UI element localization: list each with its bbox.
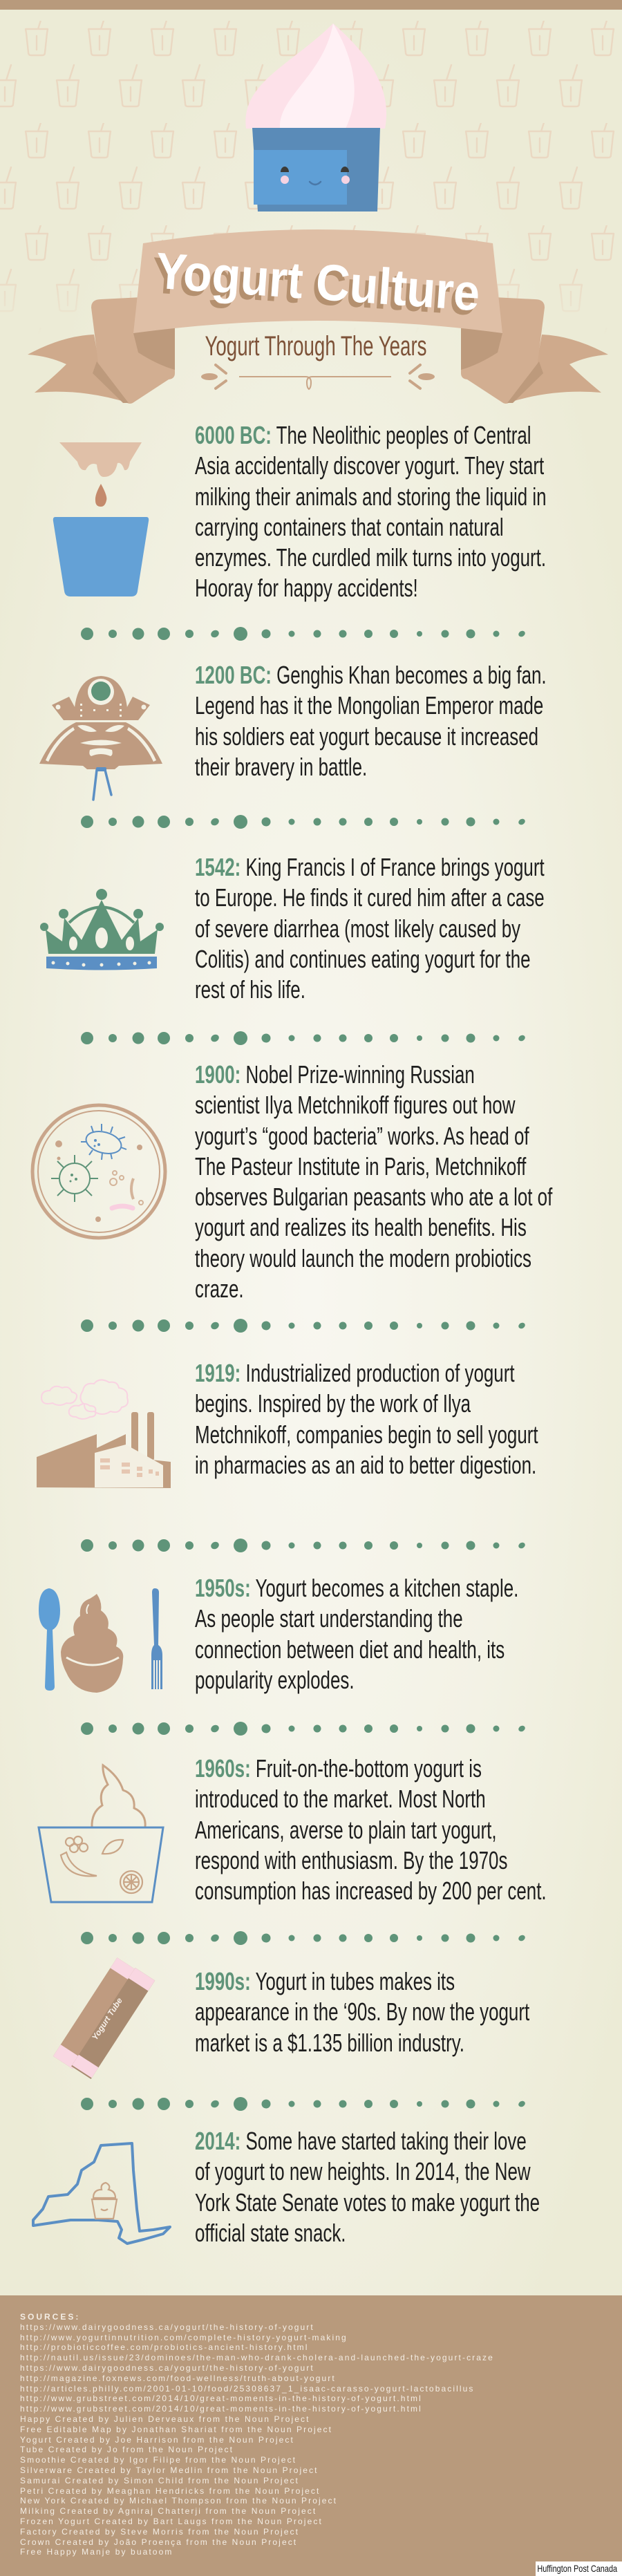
sources list: SOURCES: — [20, 2312, 80, 2322]
entry: 1900: craze. — [195, 1275, 244, 1303]
dots divider — [81, 1319, 525, 1333]
entry: 6000 BC: Hooray for happy accidents! — [195, 574, 418, 602]
entry: 6000 BC: 6000 BC: The Neolithic peoples of Central — [195, 421, 531, 449]
entry: 1542: 1542: King Francis I of France brings yogurt — [195, 853, 545, 881]
entry: 2014: 2014: Some have started taking their love — [195, 2127, 527, 2155]
entry: 1900: scientist Ilya Metchnikoff figures out how — [195, 1091, 515, 1119]
entry: 2014: official state snack. — [195, 2219, 346, 2247]
entry: 6000 BC — [195, 421, 547, 602]
icon: New York State map with yogurt — [32, 2142, 171, 2245]
entry: 1542 — [195, 853, 545, 1004]
entry: 1200 BC: Legend has it the Mongolian Emperor made — [195, 691, 543, 720]
sources list: New York Created by Michael Thompson from the Noun Project — [20, 2496, 337, 2506]
header illustration: pattern, mascot, banner — [0, 21, 614, 404]
sources list: Factory Created by Steve Morris from the Noun Project — [20, 2527, 299, 2537]
sources list: Free Editable Map by Jonathan Shariat from the Noun Project — [20, 2425, 332, 2434]
sources list: Happy Created by Julien Derveaux from the Noun Project — [20, 2414, 310, 2424]
dots divider — [81, 1722, 525, 1736]
entry: 1990s — [195, 1967, 529, 2057]
subtitle: Yogurt Through The Years — [205, 331, 427, 361]
sources list: http://probioticcoffee.com/probiotics-ancient-history.html — [20, 2342, 308, 2352]
entry: 1900: yogurt and realizes its health benefits. His — [195, 1213, 527, 1241]
entry: 1200 BC: 1200 BC: Genghis Khan becomes a big fan. — [195, 661, 547, 689]
entry: 2014: York State Senate votes to make yogurt the — [195, 2188, 540, 2217]
entry: 2014 — [195, 2127, 540, 2247]
dots divider — [81, 1031, 525, 1045]
background pattern (decorative) — [0, 21, 614, 308]
entry: 1200 BC: their bravery in battle. — [195, 753, 367, 781]
entry: 1542: to Europe. He finds it cured him after a case — [195, 883, 545, 912]
title: Yogurt Culture — [150, 246, 478, 326]
sources list: Free Happy Manje by buatoom — [20, 2547, 173, 2557]
entry: 1960s: respond with enthusiasm. By the 1970s — [195, 1846, 507, 1874]
sources list: Samurai Created by Simon Child from the Noun Project — [20, 2476, 299, 2485]
entry: 1950s — [195, 1574, 518, 1694]
dots divider — [81, 815, 525, 829]
top bar — [0, 0, 622, 10]
sources list: http://nautil.us/issue/23/dominoes/the-man-who-drank-cholera-and-launched-the-yogurt-craze — [20, 2353, 494, 2362]
sources list: Crown Created by João Proença from the Noun Project — [20, 2537, 297, 2547]
entry: 1900: The Pasteur Institute in Paris, Metchnikoff — [195, 1152, 526, 1181]
entry: 1950s: 1950s: Yogurt becomes a kitchen staple. — [195, 1574, 518, 1602]
dots divider — [81, 1931, 525, 1945]
entry: 1990s: market is a $1.135 billion industry. — [195, 2029, 464, 2057]
entry: 6000 BC: milking their animals and storing the liquid in — [195, 482, 547, 511]
sources list: http://www.yogurtinnutrition.com/complete-history-yogurt-making — [20, 2333, 348, 2342]
sources list: Petri Created by Meaghan Hendricks from the Noun Project — [20, 2486, 320, 2496]
sources list: Tube Created by Jo from the Noun Project — [20, 2445, 234, 2454]
entry: 1200 BC: his soldiers eat yogurt because it increased — [195, 722, 538, 751]
entry: 1960s: consumption has increased by 200 per cent. — [195, 1877, 547, 1905]
entry: 1990s: 1990s: Yogurt in tubes makes its — [195, 1967, 455, 1995]
sources list: Smoothie Created by Igor Filipe from the Noun Project — [20, 2455, 296, 2465]
entry: 1900: theory would launch the modern probiotics — [195, 1244, 531, 1272]
entry: 1960s: 1960s: Fruit-on-the-bottom yogurt is — [195, 1754, 482, 1783]
icon: fruit-on-the-bottom yogurt — [37, 1763, 164, 1903]
entry: 1919: in pharmacies as an aid to better digestion. — [195, 1451, 536, 1479]
title: Yogurt Culture — [154, 242, 482, 321]
sources list: http://www.grubstreet.com/2014/10/great-moments-in-the-history-of-yogurt.html — [20, 2404, 422, 2414]
entry: 2014: of yogurt to new heights. In 2014, the New — [195, 2157, 531, 2185]
entry: 1542: rest of his life. — [195, 975, 305, 1004]
icon: crown — [40, 889, 164, 970]
entry: 6000 BC: enzymes. The curdled milk turns into yogurt. — [195, 543, 546, 572]
icon: samurai — [39, 676, 162, 801]
icon: factory — [37, 1380, 171, 1488]
panel: sources — [0, 2295, 622, 2576]
sources list: https://www.dairygoodness.ca/yogurt/the-history-of-yogurt — [20, 2322, 314, 2332]
entry: 1950s: popularity explodes. — [195, 1666, 355, 1694]
sources list: Milking Created by Agniraj Chatterji from the Noun Project — [20, 2506, 317, 2516]
entry: 1950s: As people start understanding the — [195, 1604, 463, 1633]
sources list: http://magazine.foxnews.com/food-wellness/truth-about-yogurt — [20, 2373, 336, 2383]
sources list: Silverware Created by Taylor Medlin from the Noun Project — [20, 2465, 319, 2475]
icon: yogurt mascot — [245, 23, 386, 211]
entry: 1919 — [195, 1359, 538, 1479]
entry: 6000 BC: Asia accidentally discover yogurt. They start — [195, 451, 544, 480]
entry: 1900: 1900: Nobel Prize-winning Russian — [195, 1060, 475, 1089]
entry: 1200 BC — [195, 661, 547, 781]
entry: 1542: Colitis) and continues eating yogurt for the — [195, 945, 531, 973]
sources list: Yogurt Created by Joe Harrison from the Noun Project — [20, 2435, 294, 2445]
decorative flourish — [201, 365, 435, 389]
sources list: Frozen Yogurt Created by Bart Laugs from the Noun Project — [20, 2517, 323, 2526]
sources list: http://www.grubstreet.com/2014/10/great-moments-in-the-history-of-yogurt.html — [20, 2394, 422, 2403]
entry: 1900: observes Bulgarian peasants who ate a lot of — [195, 1183, 552, 1211]
dots divider — [81, 2097, 525, 2111]
icon: spoon, frozen yogurt cup, fork — [39, 1588, 162, 1693]
entry: 6000 BC: carrying containers that contain natural — [195, 513, 504, 541]
dots divider — [81, 627, 525, 641]
icon: milking udder and cup — [53, 442, 149, 596]
entry: 1960s — [195, 1754, 547, 1905]
entry: 1990s: appearance in the ‘90s. By now the yogurt — [195, 1997, 529, 2026]
icon: yogurt tubes — [53, 1957, 155, 2079]
tube label: Yogurt Tube — [90, 1996, 124, 2042]
entry: 1960s: introduced to the market. Most North — [195, 1785, 486, 1813]
banner — [28, 229, 608, 404]
dots divider — [81, 1539, 525, 1552]
credit label: Huffington Post Canada — [537, 2563, 617, 2574]
sources list: http://articles.philly.com/2001-01-10/food/25308637_1_isaac-carasso-yogurt-lactobacillus — [20, 2384, 475, 2394]
entry: 1900 — [195, 1060, 553, 1303]
entry: 1919: begins. Inspired by the work of Ilya — [195, 1389, 471, 1418]
entry: 1919: 1919: Industrialized production of yogurt — [195, 1359, 515, 1387]
entry: 1900: yogurt’s “good bacteria” works. As head of — [195, 1122, 529, 1150]
entry: 1919: Metchnikoff, companies begin to sell yogurt — [195, 1420, 538, 1449]
icon: petri dish — [30, 1103, 167, 1240]
sources list — [20, 2312, 494, 2557]
entry: 1542: of severe diarrhea (most likely caused by — [195, 914, 520, 943]
entry: 1960s: Americans, averse to plain tart yogurt, — [195, 1816, 497, 1844]
sources list: https://www.dairygoodness.ca/yogurt/the-history-of-yogurt — [20, 2363, 314, 2373]
entry: 1950s: connection between diet and health, its — [195, 1635, 505, 1664]
